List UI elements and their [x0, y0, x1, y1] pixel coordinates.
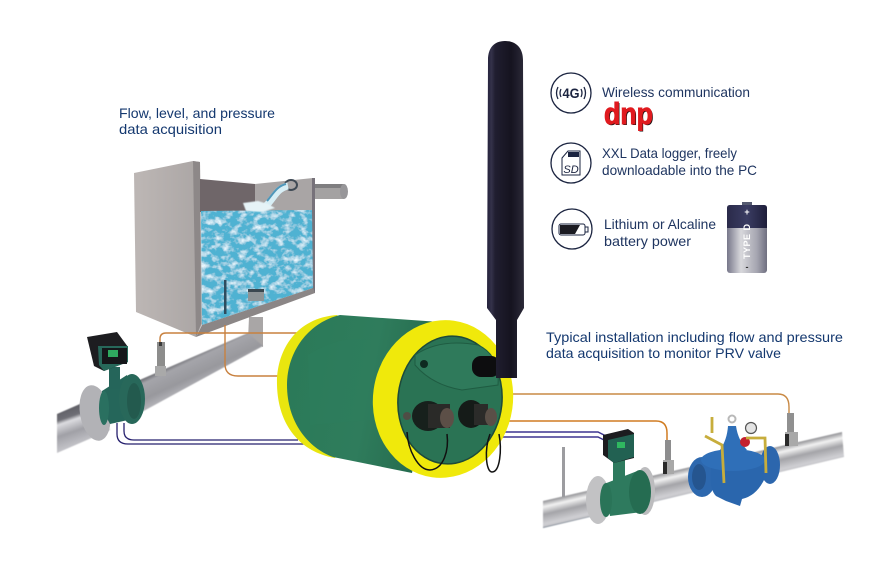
- heading: flow level and pressure: [119, 105, 275, 137]
- antenna plug: [472, 356, 500, 377]
- pressure gauge: [746, 422, 756, 434]
- left flow meter: [75, 332, 145, 443]
- flanges: [760, 446, 780, 484]
- heading: flow level and pressure: Flow, level, and pressure: [119, 105, 275, 121]
- neck: [613, 460, 625, 482]
- mount hole: [420, 360, 428, 368]
- icon: 4G wireless: [551, 73, 591, 113]
- lower body: [711, 462, 764, 506]
- icon: 4G wireless: 4G: [562, 85, 580, 101]
- front yellow ring: [363, 311, 523, 487]
- battery image: -: [746, 262, 748, 272]
- heading: flow level and pressure: data acquisition: [119, 121, 222, 137]
- PRV valve: [688, 416, 780, 506]
- right upper sensor: [785, 413, 798, 446]
- icon: battery level: [552, 209, 592, 249]
- flange: [586, 476, 610, 524]
- right pipe: [543, 432, 844, 528]
- tank side wall: [134, 161, 202, 337]
- thin probe: [562, 447, 565, 497]
- orange cables right: [505, 394, 789, 414]
- battery image: [727, 202, 767, 273]
- display: [617, 442, 625, 448]
- neck: [109, 367, 120, 389]
- text: battery power: [604, 216, 716, 249]
- cylinder body: [287, 315, 440, 473]
- heading: typical installation: Typical installation including flow and pressure: [546, 329, 843, 345]
- body: [604, 470, 642, 516]
- right lower sensor: [663, 440, 674, 474]
- right flow meter: [586, 429, 655, 524]
- left sensor: [155, 342, 166, 376]
- orange cables left: [160, 333, 300, 342]
- meter head: [87, 332, 128, 371]
- data logger: [277, 311, 523, 487]
- meter body: [102, 375, 128, 424]
- flange front: [635, 467, 655, 515]
- heading: typical installation: data acquisition to monitor PRV valve: [546, 345, 781, 361]
- connector left: [403, 401, 454, 431]
- face plate: [415, 343, 498, 390]
- text: wireless communication: Wireless communication: [602, 84, 750, 100]
- connector right: [458, 400, 497, 428]
- blue cables right: [500, 432, 606, 436]
- level sensor probe: [224, 280, 226, 314]
- wires: [117, 325, 789, 444]
- display: [108, 350, 118, 357]
- battery image: +: [744, 207, 750, 217]
- blue cables left: [117, 423, 304, 444]
- back ring: [277, 315, 350, 458]
- logo: dnp: dnp: [604, 96, 653, 131]
- icon: SD card: [551, 143, 591, 183]
- water spout: [243, 180, 297, 212]
- text: data logger: [602, 145, 757, 178]
- pressure sensor in tank: [248, 289, 264, 301]
- tank water: [201, 210, 313, 325]
- connector cables: [407, 432, 447, 470]
- flange rear: [75, 383, 115, 443]
- heading: typical installation: [546, 329, 843, 361]
- red wheel: [740, 437, 750, 447]
- text: data logger: downloadable into the PC: [602, 162, 757, 178]
- tank outlet pipe: [313, 184, 348, 199]
- left pipe: [57, 317, 263, 453]
- front face: [392, 331, 508, 469]
- antenna: [487, 41, 524, 378]
- tank bottom frame: [196, 288, 315, 337]
- text: data logger: XXL Data logger, freely: [602, 145, 737, 161]
- tank: [134, 161, 348, 337]
- body panel: [308, 339, 370, 425]
- tank back wall: [200, 179, 255, 212]
- battery image: TYPE D: [742, 223, 752, 259]
- text: battery power: battery power: [604, 233, 691, 249]
- text: battery power: Lithium or Alcaline: [604, 216, 716, 232]
- brass tubes: [705, 417, 766, 483]
- dome: [720, 426, 747, 450]
- head: [603, 429, 634, 463]
- logo: dnp: dnp: [605, 97, 654, 132]
- lifting ring: [728, 416, 736, 422]
- icon: SD card: SD: [563, 164, 579, 176]
